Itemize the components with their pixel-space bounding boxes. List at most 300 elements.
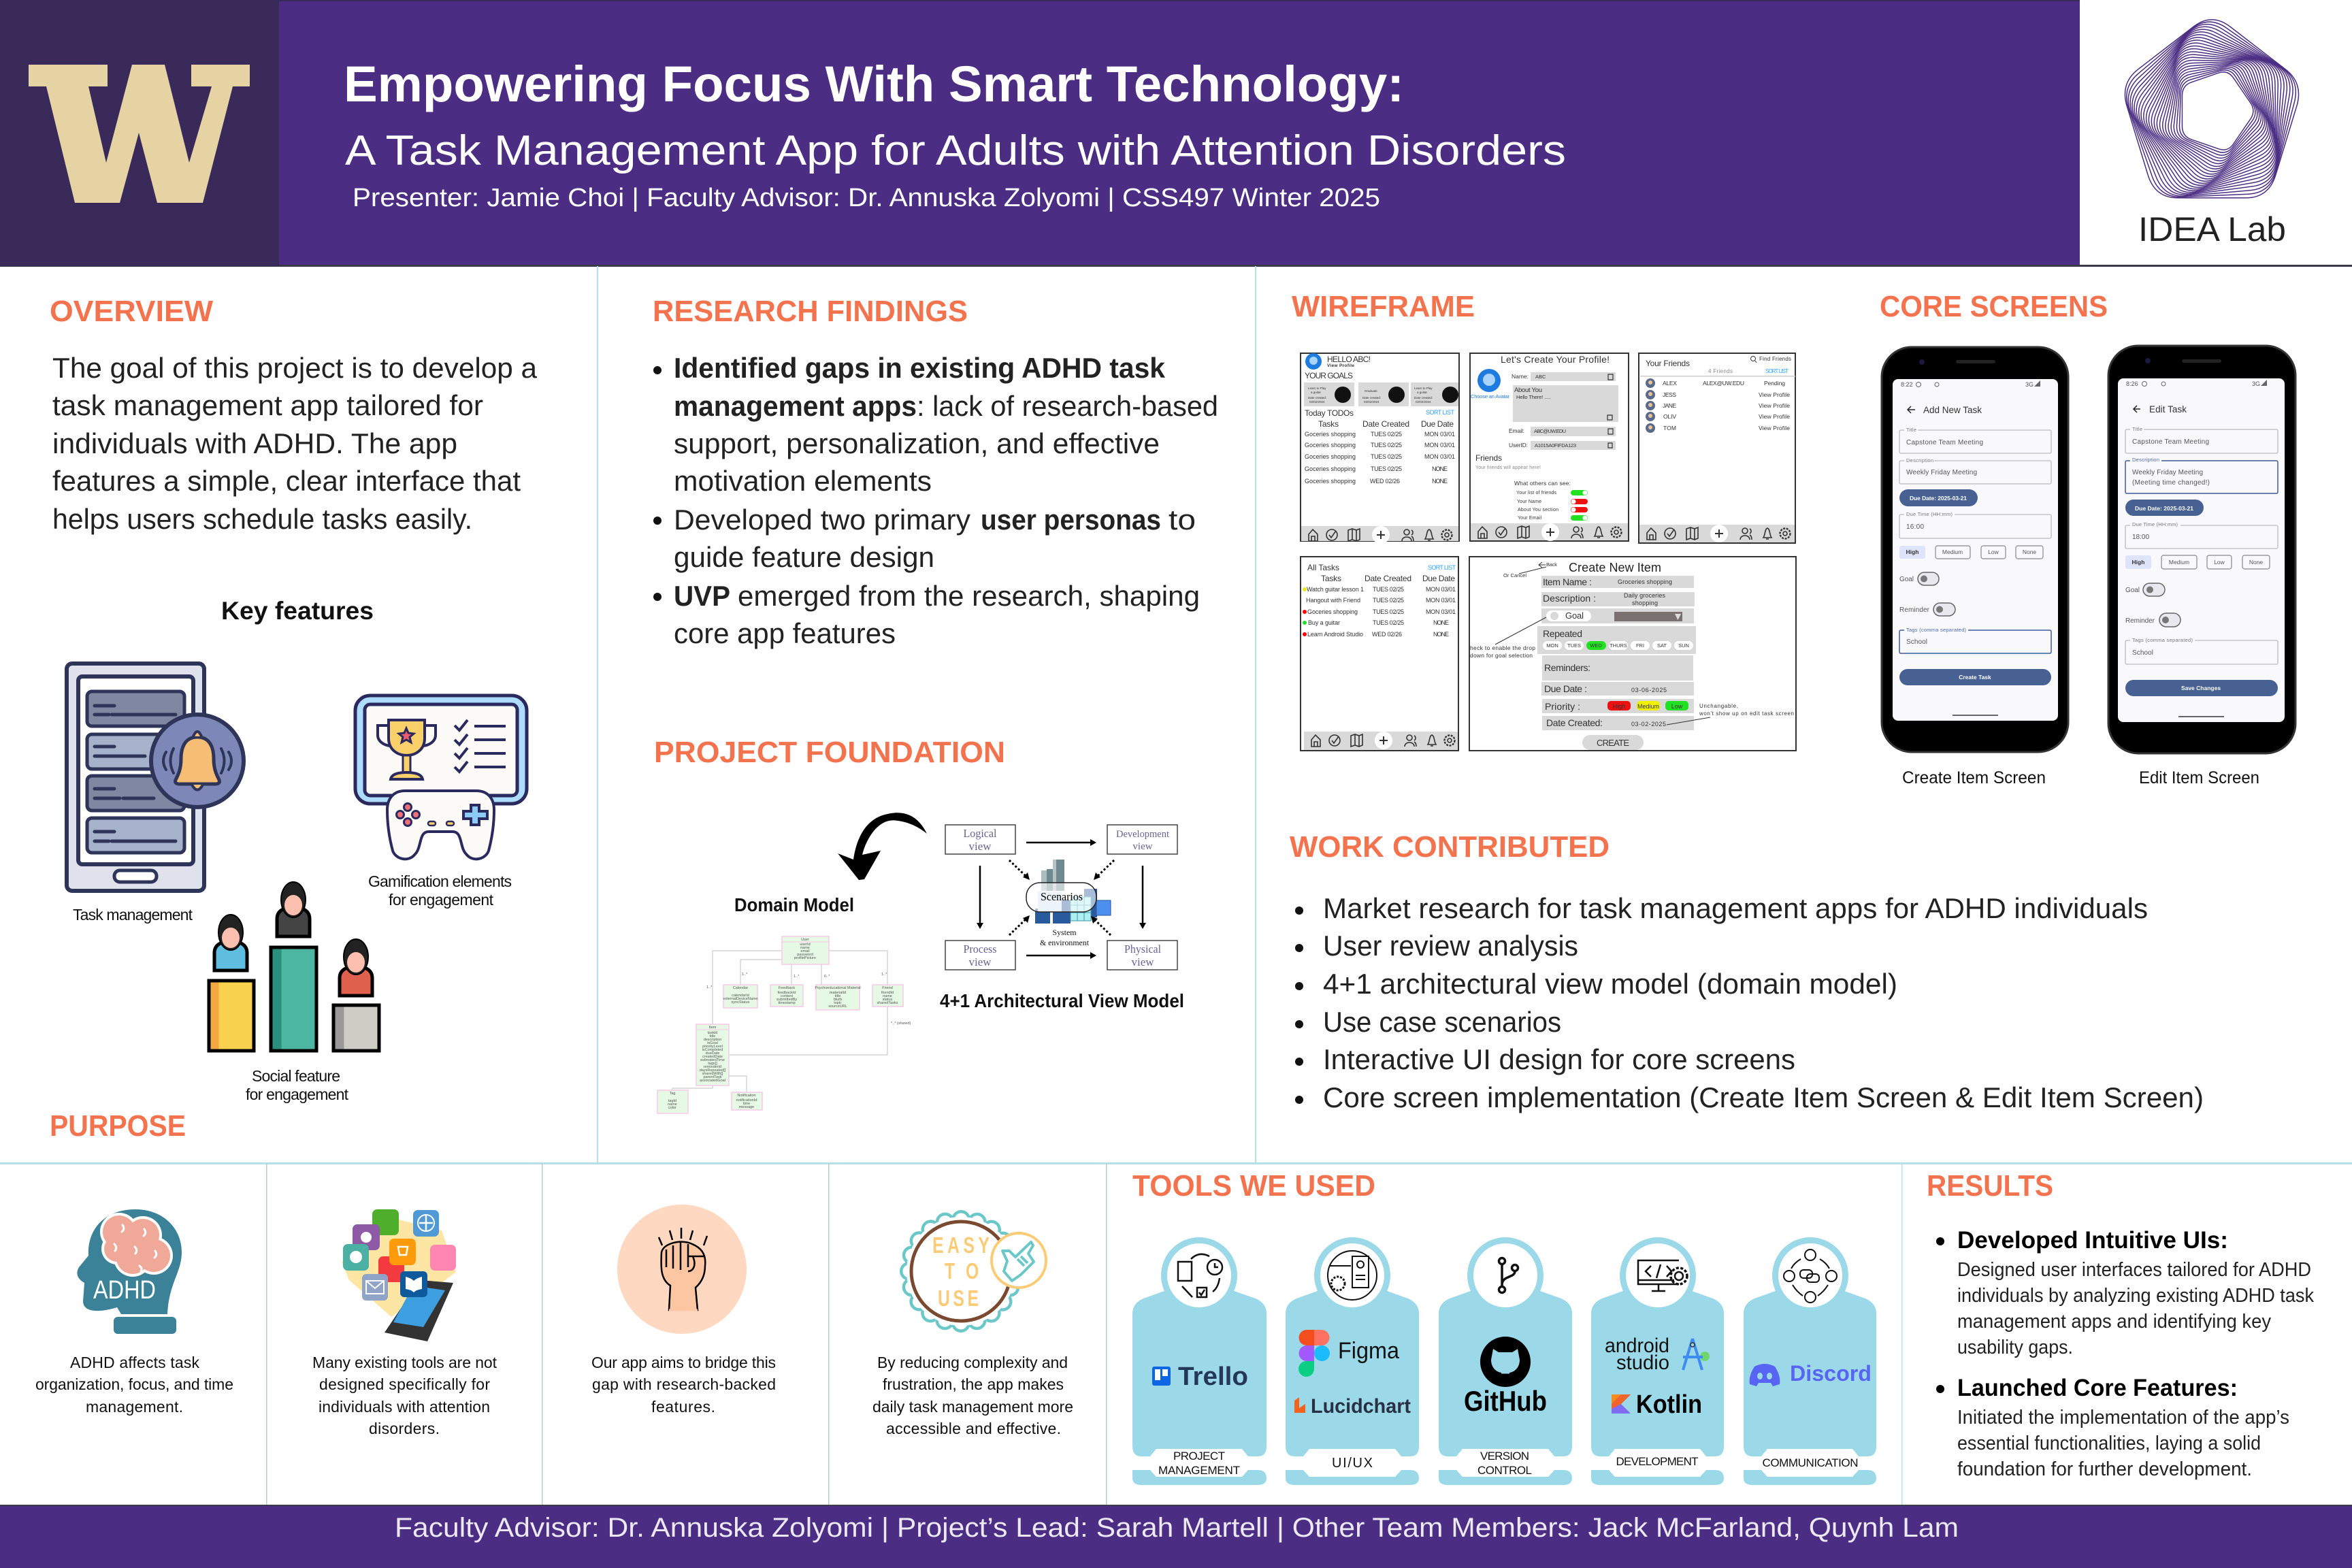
- wireframe: create new item screen: TUES: [1567, 642, 1581, 649]
- wireframe: all tasks screen: TUES 02/25: [1373, 608, 1404, 615]
- wireframe: home screen: [1301, 353, 1459, 544]
- research findings bullet list: to: [1169, 504, 1196, 536]
- phone: edit item screen: (Meeting time changed!): [2132, 479, 2210, 487]
- tool card: UI/UX: UI/UX: [1332, 1456, 1373, 1471]
- purpose card: existing tools: [312, 1209, 497, 1437]
- wireframe: profile screen: What others can see:: [1514, 480, 1571, 487]
- wireframe: home screen: Goceries shopping: [1305, 442, 1356, 448]
- phone: create item screen: Medium: [1942, 549, 1963, 555]
- tool card: project management: [1132, 1237, 1267, 1485]
- text: app aims: gap with research-backed: [592, 1375, 776, 1393]
- chart: domain model diagram: materialId: [830, 991, 846, 995]
- wireframe: friends screen: [1639, 353, 1795, 543]
- wireframe: home screen: NONE: [1432, 466, 1448, 472]
- wireframe: home screen: View Profile: [1327, 363, 1354, 368]
- icon: social leaderboard: [209, 882, 379, 1051]
- wireframe: home screen: Learn to Play: [1308, 387, 1326, 390]
- label: 4+1 architectural view model: 4+1 Architectural View Model: [940, 990, 1184, 1011]
- icon: easy to use badge: [906, 1217, 1046, 1326]
- wireframe: friends screen: JESS: [1663, 391, 1676, 398]
- wireframe: home screen: TUES 02/25: [1371, 453, 1402, 460]
- wireframe: friends screen: OLIV: [1663, 413, 1676, 420]
- research findings bullet list: core app features: [674, 617, 896, 649]
- tool card: project management: MANAGEMENT: [1158, 1464, 1240, 1477]
- work contributed list: Use case scenarios: [1323, 1006, 1561, 1038]
- phone: edit item screen: Edit Task: [2149, 404, 2187, 414]
- tool card: version control: VERSION: [1480, 1450, 1529, 1463]
- wireframe: home screen: Date created:: [1308, 396, 1326, 399]
- chart: domain model diagram: daysRepeated[]: [700, 1068, 726, 1073]
- phone: create item screen: Title: [1906, 427, 1916, 433]
- research findings bullet list: UVP: [674, 580, 730, 612]
- panel: overview: [50, 295, 538, 535]
- text: app aims: [591, 1354, 776, 1416]
- wireframe: home screen: HELLO ABC!: [1327, 355, 1371, 364]
- chart: 4+1 architectural view diagram: view: [968, 956, 992, 968]
- wireframe: all tasks screen: MON 03/01: [1426, 586, 1456, 593]
- text: ADHD: organization, focus, and time: [35, 1375, 233, 1393]
- results: developed intuitive UIs: usability gaps.: [1957, 1337, 2073, 1358]
- phone: edit item screen: Weekly Friday Meeting: [2132, 469, 2203, 476]
- presenter line: Presenter: Jamie Choi | Faculty Advisor: Dr. Annuska Zolyomi | CSS497 Winter 2025: [353, 184, 1380, 212]
- phone: edit item screen: Due Date: 2025-03-21: [2135, 505, 2193, 512]
- wireframe: all tasks screen: All Tasks: [1307, 563, 1339, 572]
- wireframe: home screen: 02/02/2024: [1416, 400, 1431, 404]
- icon: easy to use badge: USE: [938, 1287, 979, 1311]
- text: easy to use: By reducing complexity and: [877, 1354, 1068, 1371]
- logo: android studio: [1605, 1335, 1710, 1374]
- label: domain model: Domain Model: [734, 894, 854, 915]
- heading: research findings: RESEARCH FINDINGS: [653, 295, 968, 328]
- wireframe: profile screen: [1470, 353, 1629, 541]
- heading: core screens: CORE SCREENS: [1880, 290, 2108, 323]
- overview text: task management app tailored for: [52, 389, 483, 421]
- wireframe: profile screen: Choose an Avatar: [1471, 393, 1509, 399]
- results: launched core features: [1936, 1375, 2289, 1480]
- wireframe: all tasks screen: Tasks: [1321, 574, 1341, 583]
- wireframe: profile screen: Your Email: [1518, 516, 1541, 521]
- text: existing tools: Many existing tools are not: [312, 1354, 497, 1371]
- wireframe: all tasks screen: Goceries shopping: [1307, 608, 1358, 615]
- wireframe: create new item screen: Goal: [1565, 610, 1584, 621]
- work contributed list: Core screen implementation (Create Item Screen & Edit Item Screen): [1323, 1081, 2204, 1113]
- phone: create item screen: Due Date: 2025-03-21: [1910, 495, 1967, 502]
- research findings bullet list: Developed two primary: [674, 504, 970, 536]
- chart: domain model diagram: isCompleted: [702, 1048, 723, 1052]
- chart: domain model diagram: title: [835, 994, 840, 998]
- wireframe: profile screen: Your Name: [1517, 500, 1541, 504]
- results: launched core features: foundation for further development.: [1957, 1458, 2252, 1480]
- overview text: helps users schedule tasks easily.: [52, 503, 472, 535]
- wireframe: home screen: TUES 02/25: [1371, 442, 1402, 448]
- wireframe: all tasks screen: WED 02/26: [1372, 631, 1402, 638]
- panel: tools we used: [1132, 1169, 1876, 1485]
- chart: domain model diagram: friendId: [881, 991, 894, 995]
- phone: edit item screen: Capstone Team Meeting: [2132, 438, 2209, 446]
- phone: edit item screen: Medium: [2169, 559, 2189, 566]
- wireframe: create new item screen: shopping: [1632, 600, 1658, 606]
- icon: apps on a phone: [342, 1209, 456, 1341]
- phone: create item screen: Tags (comma separated): [1906, 627, 1967, 633]
- wireframe: create new item screen: MON: [1546, 642, 1558, 649]
- wireframe: create new item screen: High: [1613, 703, 1625, 710]
- phone: edit item screen: Save Changes: [2181, 685, 2221, 691]
- wireframe: home screen: Date created:: [1414, 396, 1433, 399]
- logo: github: GitHub: [1464, 1385, 1547, 1417]
- phone: edit item screen: Title: [2132, 426, 2142, 432]
- wireframe: friends screen: View Profile: [1759, 413, 1790, 420]
- wireframe: home screen: Goceries shopping: [1305, 431, 1356, 438]
- wireframe: profile screen: A1015A0FIFDA123: [1535, 442, 1576, 448]
- phone: create item screen: Weekly Friday Meeting: [1906, 469, 1977, 476]
- wireframe: profile screen: Your friends will appear here!: [1475, 466, 1541, 470]
- chart: 4+1 architectural view diagram: Scenarios: [1041, 890, 1083, 903]
- footer banner: Faculty Advisor: Dr. Annuska Zolyomi | Project’s Lead: Sarah Martell | Other Team Members: Jack McFarland, Quynh Lam: [395, 1513, 1959, 1543]
- chart: domain model diagram: sourceURL: [828, 1004, 847, 1009]
- label: create item screen: Create Item Screen: [1902, 768, 2046, 787]
- text: easy to use: daily task management more: [872, 1398, 1073, 1416]
- chart: domain model diagram: feedbackId: [778, 991, 796, 995]
- heading: tools we used: TOOLS WE USED: [1132, 1169, 1375, 1203]
- phone: edit item screen: Tags (comma separated): [2132, 637, 2193, 643]
- text: easy to use: frustration, the app makes: [883, 1375, 1064, 1393]
- wireframe: all tasks screen: [1301, 557, 1458, 751]
- chart: domain model diagram: reminderId: [704, 1065, 721, 1069]
- chart: domain model diagram: userId: [800, 943, 811, 947]
- icon: gamification monitor and controller: [355, 696, 527, 859]
- panel: purpose: [35, 1109, 1073, 1437]
- results: developed intuitive UIs: individuals by analyzing existing ADHD task: [1957, 1285, 2314, 1307]
- wireframe: friends screen: 4 Friends: [1708, 368, 1733, 374]
- chart: 4+1 architectural view diagram: Physical: [1124, 943, 1161, 956]
- wireframe: all tasks screen: NONE: [1433, 631, 1449, 638]
- label: social feature: for engagement: [246, 1085, 349, 1103]
- title: Empowering Focus With Smart Technology:: [344, 56, 1404, 112]
- wireframe: create new item screen: won't show up on edit task screen: [1699, 710, 1794, 717]
- wireframe: profile screen: Hello There! .....: [1516, 394, 1551, 400]
- wireframe: create new item screen: CREATE: [1597, 738, 1629, 748]
- wireframe: create new item screen: Unchangable,: [1699, 703, 1738, 709]
- chart: domain model diagram: password: [797, 953, 813, 957]
- text: easy to use: accessible and effective.: [886, 1420, 1061, 1437]
- chart: 4+1 architectural view diagram: view: [1131, 956, 1154, 968]
- phone: create item screen: Capstone Team Meeting: [1906, 439, 1983, 446]
- wireframe: create new item screen: Repeated: [1543, 628, 1582, 639]
- text: existing tools: disorders.: [369, 1420, 440, 1437]
- IDEA Lab logo: [2122, 16, 2301, 248]
- work contributed list: Market research for task management apps for ADHD individuals: [1323, 892, 2148, 924]
- wireframe: friends screen: View Profile: [1759, 402, 1790, 409]
- results: launched core features: Launched Core Features:: [1957, 1375, 2238, 1401]
- wireframe: home screen: Date Created: [1362, 419, 1409, 429]
- logo: lucidchart: Lucidchart: [1311, 1395, 1411, 1418]
- wireframe: home screen: Goceries shopping: [1305, 478, 1356, 485]
- logo: discord: [1750, 1361, 1872, 1386]
- text: ADHD: management.: [86, 1398, 183, 1416]
- phone: create item screen: 8:22: [1901, 381, 1913, 388]
- logo: kotlin: [1612, 1390, 1702, 1419]
- wireframe: friends screen: Your Friends: [1646, 359, 1690, 368]
- wireframe: profile screen: Name:: [1512, 373, 1529, 380]
- heading: results: RESULTS: [1927, 1169, 2053, 1203]
- heading: purpose: PURPOSE: [50, 1109, 186, 1143]
- chart: 4+1 architectural view diagram: [945, 825, 1177, 970]
- text: existing tools: [312, 1354, 497, 1437]
- phone: create item screen: Reminder: [1899, 606, 1930, 614]
- wireframe: friends screen: JANE: [1663, 402, 1676, 409]
- tool card: version control: [1439, 1237, 1572, 1485]
- tool card: communication: [1744, 1237, 1876, 1485]
- wireframe: friends screen: TOM: [1663, 425, 1676, 431]
- wireframe: home screen: Graduate: [1365, 389, 1377, 393]
- work contributed list: [1295, 892, 2204, 1113]
- chart: domain model diagram: taskId: [708, 1031, 717, 1035]
- phone: create item screen: Description: [1906, 457, 1933, 463]
- tool card: development: DEVELOPMENT: [1616, 1455, 1699, 1468]
- chart: domain model diagram: associatedGoal: [700, 1079, 725, 1083]
- phone: create item screen: School: [1906, 638, 1927, 646]
- phone: create item screen: [1882, 347, 2068, 752]
- chart: domain model diagram: content: [781, 994, 793, 998]
- chart: domain model diagram: priorityLevel: [702, 1045, 723, 1049]
- phone: edit item screen: Low: [2214, 559, 2225, 566]
- panel: results: [1927, 1169, 2314, 1480]
- wireframe: profile screen: Email:: [1509, 427, 1524, 434]
- chart: domain model diagram: Calendar: [733, 986, 748, 990]
- wireframe: all tasks screen: Hangout with Friend: [1306, 597, 1360, 604]
- logo: figma: Figma: [1338, 1338, 1399, 1364]
- wireframe: friends screen: Pending: [1764, 380, 1785, 387]
- wireframe: home screen: MON 03/01: [1424, 431, 1455, 438]
- subtitle: A Task Management App for Adults with Attention Disorders: [345, 127, 1566, 174]
- wireframe: friends screen: ALEX@UW.EDU: [1703, 380, 1744, 387]
- label: social feature: Social feature: [252, 1067, 340, 1085]
- text: app aims: features.: [651, 1398, 715, 1416]
- chart: domain model diagram: email: [800, 949, 810, 953]
- wireframe: all tasks screen: SORT LIST: [1428, 564, 1456, 571]
- wireframe: home screen: TUES 02/25: [1371, 466, 1402, 472]
- chart: domain model diagram: timestamp: [778, 1001, 796, 1005]
- results: developed intuitive UIs: management apps and identifying key: [1957, 1311, 2271, 1333]
- wireframe: all tasks screen: Date Created: [1365, 574, 1411, 583]
- work contributed list: 4+1 architectural view model (domain model): [1323, 968, 1897, 1000]
- wireframe: create new item screen: Daily groceries: [1624, 592, 1666, 599]
- wireframe: create new item screen: WED: [1590, 642, 1602, 649]
- tool card: communication: COMMUNICATION: [1763, 1456, 1858, 1469]
- chart: domain model diagram: parentTask: [704, 1075, 722, 1079]
- logo: figma: [1298, 1330, 1399, 1377]
- wireframe: home screen: SORT LIST: [1426, 409, 1455, 416]
- text: existing tools: designed specifically for: [319, 1375, 490, 1393]
- wireframe: home screen: 02/02/2024: [1309, 400, 1325, 404]
- phone: edit item screen: [2108, 346, 2296, 753]
- heading: wireframe: WIREFRAME: [1292, 290, 1475, 323]
- work contributed list: Interactive UI design for core screens: [1323, 1043, 1795, 1075]
- wireframe: home screen: Tasks: [1318, 419, 1339, 429]
- wireframe: create new item screen: 03-06-2025: [1631, 687, 1667, 693]
- phone: edit item screen: Reminder: [2125, 617, 2155, 625]
- chart: domain model diagram: 1..*: [794, 975, 800, 979]
- wireframe: profile screen: ABC@UW.EDU: [1534, 428, 1566, 434]
- chart: domain model diagram: estimatedTime: [700, 1058, 725, 1062]
- chart: domain model diagram: externalDeviceName: [723, 997, 758, 1001]
- chart: domain model diagram: createdDate: [702, 1055, 723, 1059]
- label: task management: Task management: [73, 906, 193, 924]
- purpose card: easy to use: [872, 1217, 1073, 1437]
- chart: 4+1 architectural view diagram: Development: [1116, 829, 1170, 840]
- wireframe: all tasks screen: TUES 02/25: [1373, 586, 1404, 593]
- chart: domain model diagram: time: [743, 1102, 750, 1106]
- chart: domain model diagram: description: [704, 1038, 721, 1042]
- wireframe: create new item screen: Description :: [1543, 593, 1596, 604]
- wireframe: all tasks screen: MON 03/01: [1426, 608, 1456, 615]
- wireframe: home screen: Date created:: [1362, 396, 1381, 399]
- chart: domain model diagram: Friend: [882, 986, 893, 990]
- chart: domain model diagram: [657, 936, 911, 1113]
- phone: edit item screen: Due Time (HH:mm): [2132, 521, 2178, 527]
- results: developed intuitive UIs: Developed Intuitive UIs:: [1957, 1227, 2228, 1254]
- wireframe: home screen: TUES 02/25: [1371, 431, 1402, 438]
- wireframe: create new item screen: Item Name :: [1543, 576, 1592, 587]
- tool card: project management: PROJECT: [1173, 1450, 1225, 1463]
- chart: domain model diagram: message: [739, 1105, 754, 1109]
- chart: 4+1 architectural view diagram: Process: [964, 943, 996, 956]
- wireframe: profile screen: About You section: [1518, 508, 1558, 512]
- panel: wireframe: [1292, 290, 1796, 751]
- label: gamification: for engagement: [389, 891, 494, 909]
- wireframe: create new item screen: Due Date :: [1544, 683, 1587, 694]
- panel: project foundation: [654, 736, 1184, 1113]
- wireframe: create new item screen: SUN: [1678, 642, 1689, 649]
- chart: domain model diagram: blurb: [834, 998, 842, 1002]
- wireframe: all tasks screen: Buy a guitar: [1308, 619, 1340, 626]
- panel: key features: [67, 597, 527, 1103]
- tool card: UI/UX: [1286, 1237, 1419, 1485]
- panel: research findings: [653, 295, 1218, 649]
- purpose card: ADHD: [35, 1209, 233, 1416]
- chart: domain model diagram: 1..*: [881, 973, 887, 977]
- text: easy to use: [872, 1354, 1073, 1437]
- chart: domain model diagram: notificationId: [736, 1098, 757, 1102]
- wireframe: home screen: MON 03/01: [1424, 453, 1455, 460]
- wireframe: home screen: Today TODOs: [1305, 408, 1354, 418]
- label: gamification: Gamification elements: [368, 872, 512, 890]
- research findings bullet list: support, personalization, and effective: [674, 427, 1160, 459]
- chart: domain model diagram: name: [800, 946, 810, 950]
- phone: create item screen: Add New Task: [1923, 405, 1982, 415]
- wireframe: all tasks screen: Watch guitar lesson 1: [1307, 586, 1364, 593]
- arrow: curved pointer to domain model: [838, 813, 927, 880]
- chart: domain model diagram: sharedTasks: [877, 1001, 898, 1005]
- chart: domain model diagram: 0..*: [824, 975, 830, 979]
- wireframe: friends screen: View Profile: [1759, 391, 1790, 398]
- chart: domain model diagram: dueDate: [706, 1051, 719, 1056]
- wireframe: create new item screen: Medium: [1637, 703, 1659, 710]
- icon: ADHD head: ADHD: [93, 1276, 156, 1305]
- wireframe: profile screen: About You: [1514, 387, 1542, 394]
- phone: create item screen: 3G: [2025, 381, 2034, 388]
- chart: domain model diagram: sharedWith[]: [702, 1072, 723, 1076]
- research findings bullet list: guide feature design: [674, 541, 934, 573]
- heading: work contributed: WORK CONTRIBUTED: [1290, 830, 1610, 864]
- wireframe: create new item screen: Priority :: [1545, 701, 1580, 712]
- overview text: features a simple, clear interface that: [52, 465, 521, 497]
- phone: create item screen: Due Time (HH:mm): [1906, 511, 1953, 517]
- overview text: The goal of this project is to develop a: [52, 352, 538, 384]
- header banner: [0, 0, 2352, 267]
- chart: domain model diagram: Item: [709, 1026, 717, 1030]
- section divider lines: [0, 266, 2352, 1505]
- wireframe: all tasks screen: NONE: [1433, 619, 1449, 626]
- phone: edit item screen: 8:26: [2126, 380, 2138, 387]
- wireframe: all tasks screen: TUES 02/25: [1373, 619, 1404, 626]
- overview text: individuals with ADHD. The app: [52, 427, 457, 459]
- heading: overview: OVERVIEW: [50, 295, 213, 328]
- wireframe: create new item screen: Reminders:: [1544, 662, 1590, 673]
- chart: domain model diagram: topic: [834, 1001, 842, 1005]
- icon: raised fist: [617, 1205, 747, 1334]
- wireframe: friends screen: SORT LIST: [1765, 368, 1788, 374]
- wireframe: create new item screen: Low: [1671, 703, 1683, 710]
- wireframe: create new item screen: [1469, 557, 1796, 751]
- chart: domain model diagram: 1..*: [742, 973, 748, 977]
- heading: key features: Key features: [221, 597, 374, 625]
- wireframe: home screen: Learn to Play: [1414, 387, 1433, 390]
- wireframe: create new item screen: THURS: [1610, 642, 1627, 649]
- overview text: [52, 352, 538, 535]
- icon: easy to use badge: TO: [945, 1260, 979, 1284]
- footer banner: [0, 1505, 2352, 1568]
- chart: domain model diagram: Psychoeducational Material: [815, 986, 861, 990]
- wireframe: home screen: Goceries shopping: [1305, 466, 1356, 472]
- chart: domain model diagram: submittedBy: [777, 998, 797, 1002]
- logo: android studio: studio: [1616, 1352, 1669, 1374]
- research findings bullet list: Identified gaps in existing ADHD task: [674, 352, 1166, 384]
- chart: domain model diagram: Notification: [737, 1094, 756, 1098]
- wireframe: friends screen: Find Friends: [1759, 356, 1791, 362]
- IDEA Lab logo: IDEA Lab: [2138, 210, 2286, 248]
- chart: domain model diagram: name: [883, 994, 892, 998]
- icon: easy to use badge: EASY: [932, 1234, 990, 1258]
- panel: core screens: [1880, 290, 2296, 787]
- phone: create item screen: Low: [1988, 549, 1999, 555]
- chart: 4+1 architectural view diagram: view: [968, 840, 992, 853]
- chart: domain model diagram: User: [801, 938, 809, 942]
- panel: work contributed: [1290, 830, 2204, 1113]
- research findings bullet list: motivation elements: [674, 465, 932, 497]
- results: developed intuitive UIs: Designed user interfaces tailored for ADHD: [1957, 1259, 2311, 1281]
- wireframe: home screen: a guitar: [1311, 391, 1322, 394]
- results: launched core features: Initiated the implementation of the app’s: [1957, 1407, 2289, 1428]
- wireframe: friends screen: ALEX: [1663, 380, 1677, 387]
- chart: domain model diagram: Tag: [670, 1092, 675, 1096]
- chart: domain model diagram: Feedback: [779, 986, 795, 990]
- wireframe: profile screen: ABC: [1535, 374, 1546, 380]
- chart: 4+1 architectural view diagram: System: [1052, 928, 1077, 937]
- logo: kotlin: Kotlin: [1636, 1390, 1702, 1419]
- phone: edit item screen: Goal: [2125, 587, 2140, 594]
- results: developed intuitive UIs: [1936, 1227, 2314, 1358]
- phone: create item screen: None: [2023, 549, 2036, 555]
- wireframe: profile screen: Your list of friends: [1516, 491, 1557, 495]
- wireframe: profile screen: Let's Create Your Profile!: [1501, 354, 1610, 365]
- wireframe: home screen: MON 03/01: [1424, 442, 1455, 448]
- heading: project foundation: PROJECT FOUNDATION: [654, 736, 1005, 769]
- icon: ADHD head: [77, 1209, 182, 1334]
- text: app aims: Our app aims to bridge this: [591, 1354, 776, 1371]
- chart: domain model diagram: title: [710, 1034, 715, 1039]
- wireframe: all tasks screen: Learn Android Studio: [1307, 631, 1363, 638]
